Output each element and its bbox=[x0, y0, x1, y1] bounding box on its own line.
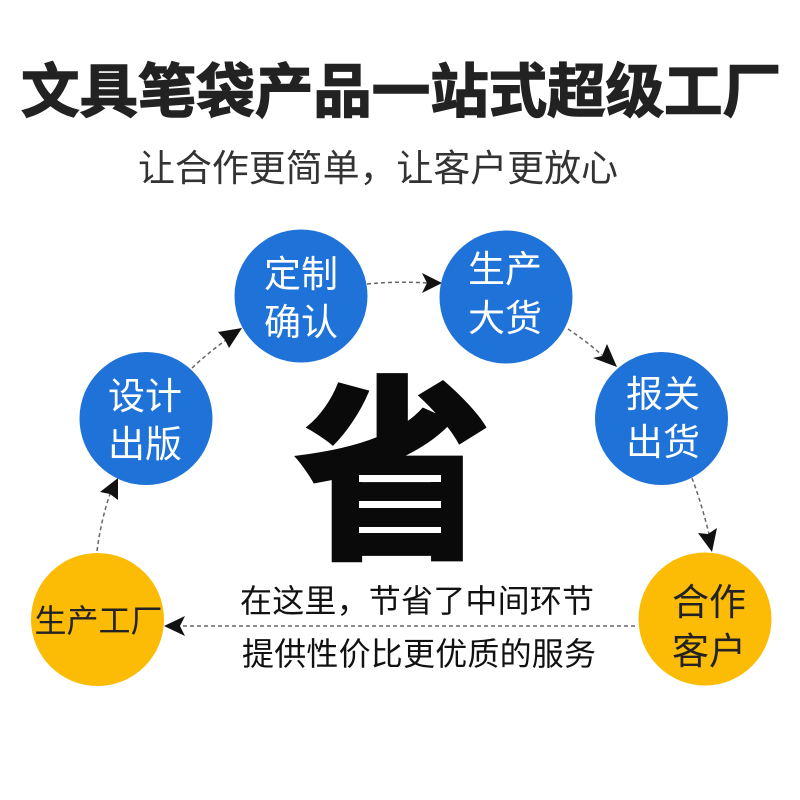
step: shipping: 报关 bbox=[626, 374, 700, 415]
step: custom bbox=[234, 230, 368, 362]
step: custom: 确认 bbox=[264, 302, 338, 343]
step: client bbox=[638, 552, 772, 686]
step: shipping bbox=[595, 352, 728, 485]
step: design: 出版 bbox=[108, 424, 182, 465]
step: design: 设计 bbox=[108, 376, 182, 417]
step: client: 合作 bbox=[672, 582, 746, 623]
arrow: design to custom bbox=[192, 328, 242, 368]
step: factory bbox=[31, 553, 164, 686]
step: custom: 定制 bbox=[264, 254, 338, 295]
arrow: custom to production bbox=[367, 273, 442, 293]
step: production: 大货 bbox=[468, 298, 542, 339]
step: design bbox=[80, 352, 212, 485]
arrow: production to shipping bbox=[568, 329, 617, 367]
step: shipping: 出货 bbox=[626, 422, 700, 463]
arrow: factory to design bbox=[97, 478, 118, 551]
step: client: 客户 bbox=[672, 631, 746, 672]
step: factory: 生产工厂 bbox=[34, 603, 163, 639]
step: production: 生产 bbox=[468, 249, 542, 290]
caption line 1: 在这里，节省了中间环节 bbox=[240, 583, 594, 619]
subtitle: 让合作更简单，让客户更放心 bbox=[138, 148, 618, 189]
caption line 2: 提供性价比更优质的服务 bbox=[242, 636, 596, 672]
title: 文具笔袋产品一站式超级工厂 bbox=[21, 60, 781, 125]
step: production bbox=[440, 230, 572, 364]
central character: 省 bbox=[295, 365, 491, 584]
arrow: client to factory bbox=[164, 616, 635, 636]
arrow: shipping to client bbox=[692, 478, 717, 552]
